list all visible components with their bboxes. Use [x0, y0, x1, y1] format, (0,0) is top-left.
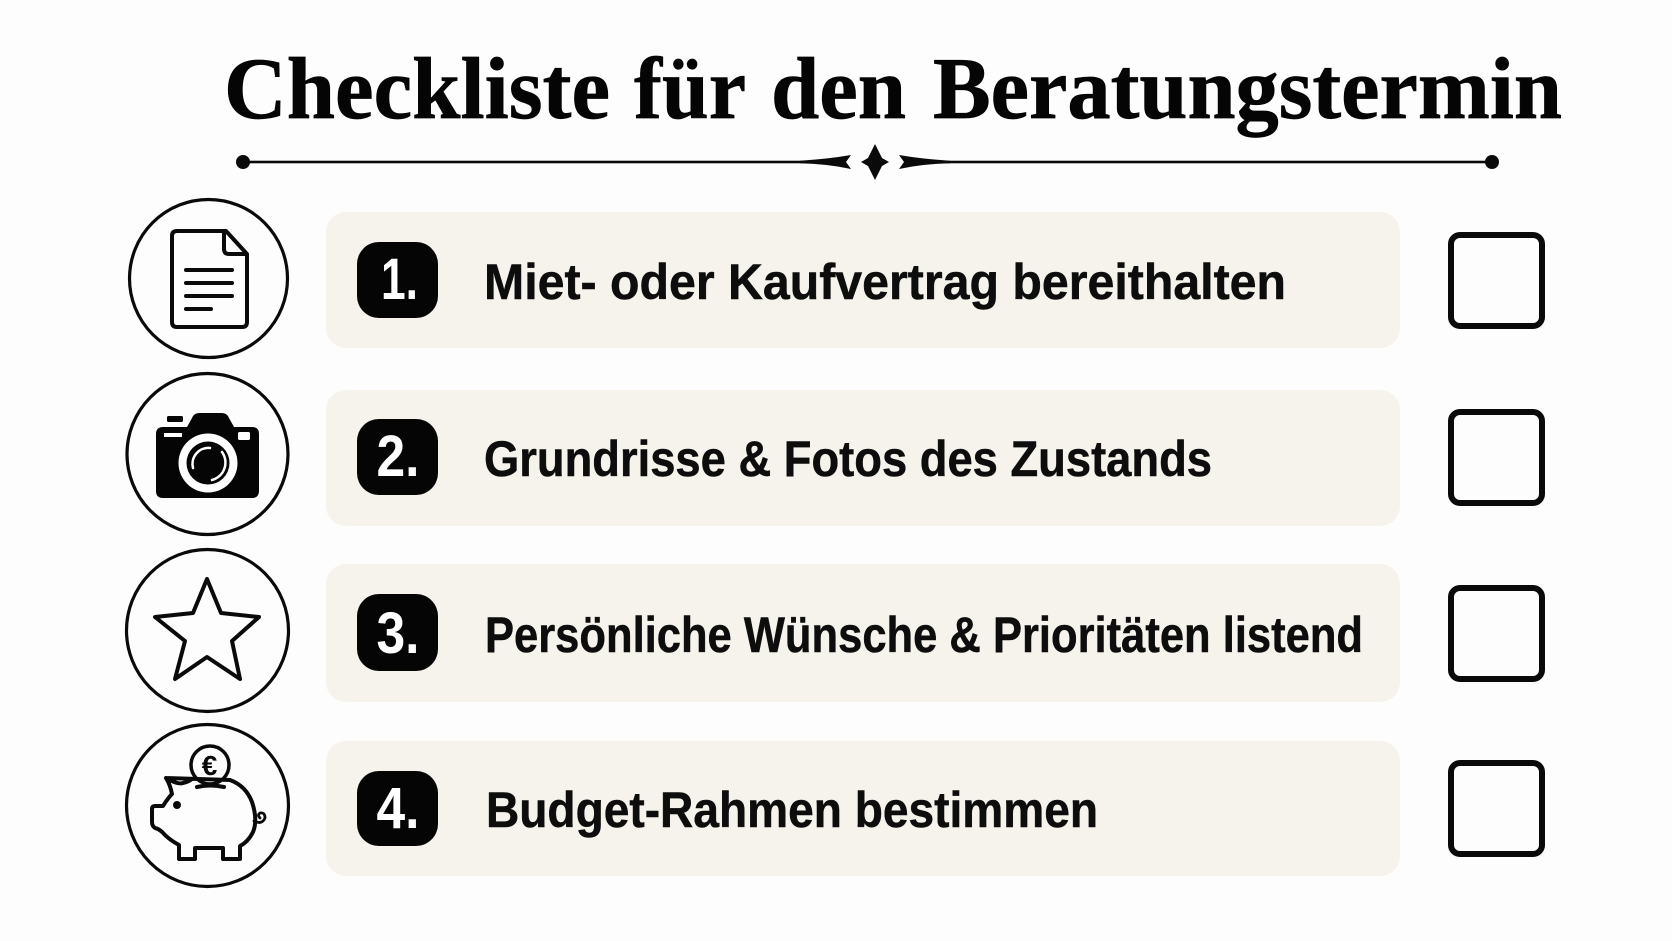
ornamental divider — [236, 144, 1499, 180]
panel: item 1 — [326, 212, 1400, 348]
checkbox 2 — [1451, 412, 1542, 503]
row 3: wishes — [126, 550, 1542, 712]
number badge 3 — [357, 594, 438, 671]
icon: piggy bank — [126, 724, 288, 886]
title: den — [771, 41, 906, 138]
icon: piggy bank: € — [202, 750, 218, 781]
title — [224, 41, 1562, 138]
row 1: contract — [130, 200, 1542, 358]
title: Checkliste — [224, 41, 610, 138]
checkbox 3 — [1451, 588, 1542, 679]
checkbox 1 — [1451, 235, 1542, 326]
number badge 2: 2. — [376, 424, 420, 489]
number badge 3: 3. — [376, 601, 420, 666]
text: item 4: Budget-Rahmen bestimmen — [486, 782, 1098, 838]
icon: camera — [127, 374, 288, 534]
row 4: budget — [126, 724, 1542, 886]
panel: item 2 — [326, 390, 1400, 526]
text: item 2: Grundrisse & Fotos des Zustands — [484, 431, 1212, 487]
number badge 2 — [357, 419, 438, 495]
checkbox 4 — [1451, 763, 1542, 854]
title: Beratungstermin — [933, 41, 1562, 138]
text: item 3: Persönliche Wünsche & Prioritäten listend — [485, 607, 1363, 663]
number badge 1 — [357, 242, 438, 318]
icon: star — [126, 550, 288, 712]
number badge 4: 4. — [376, 776, 420, 841]
panel: item 4 — [326, 741, 1400, 876]
title: für — [634, 41, 746, 138]
number badge 4 — [357, 771, 438, 846]
row 2: photos — [127, 374, 1542, 534]
icon: document — [130, 200, 288, 358]
panel: item 3 — [326, 564, 1400, 702]
number badge 1: 1. — [381, 247, 418, 312]
text: item 1: Miet- oder Kaufvertrag bereithalten — [484, 254, 1286, 310]
